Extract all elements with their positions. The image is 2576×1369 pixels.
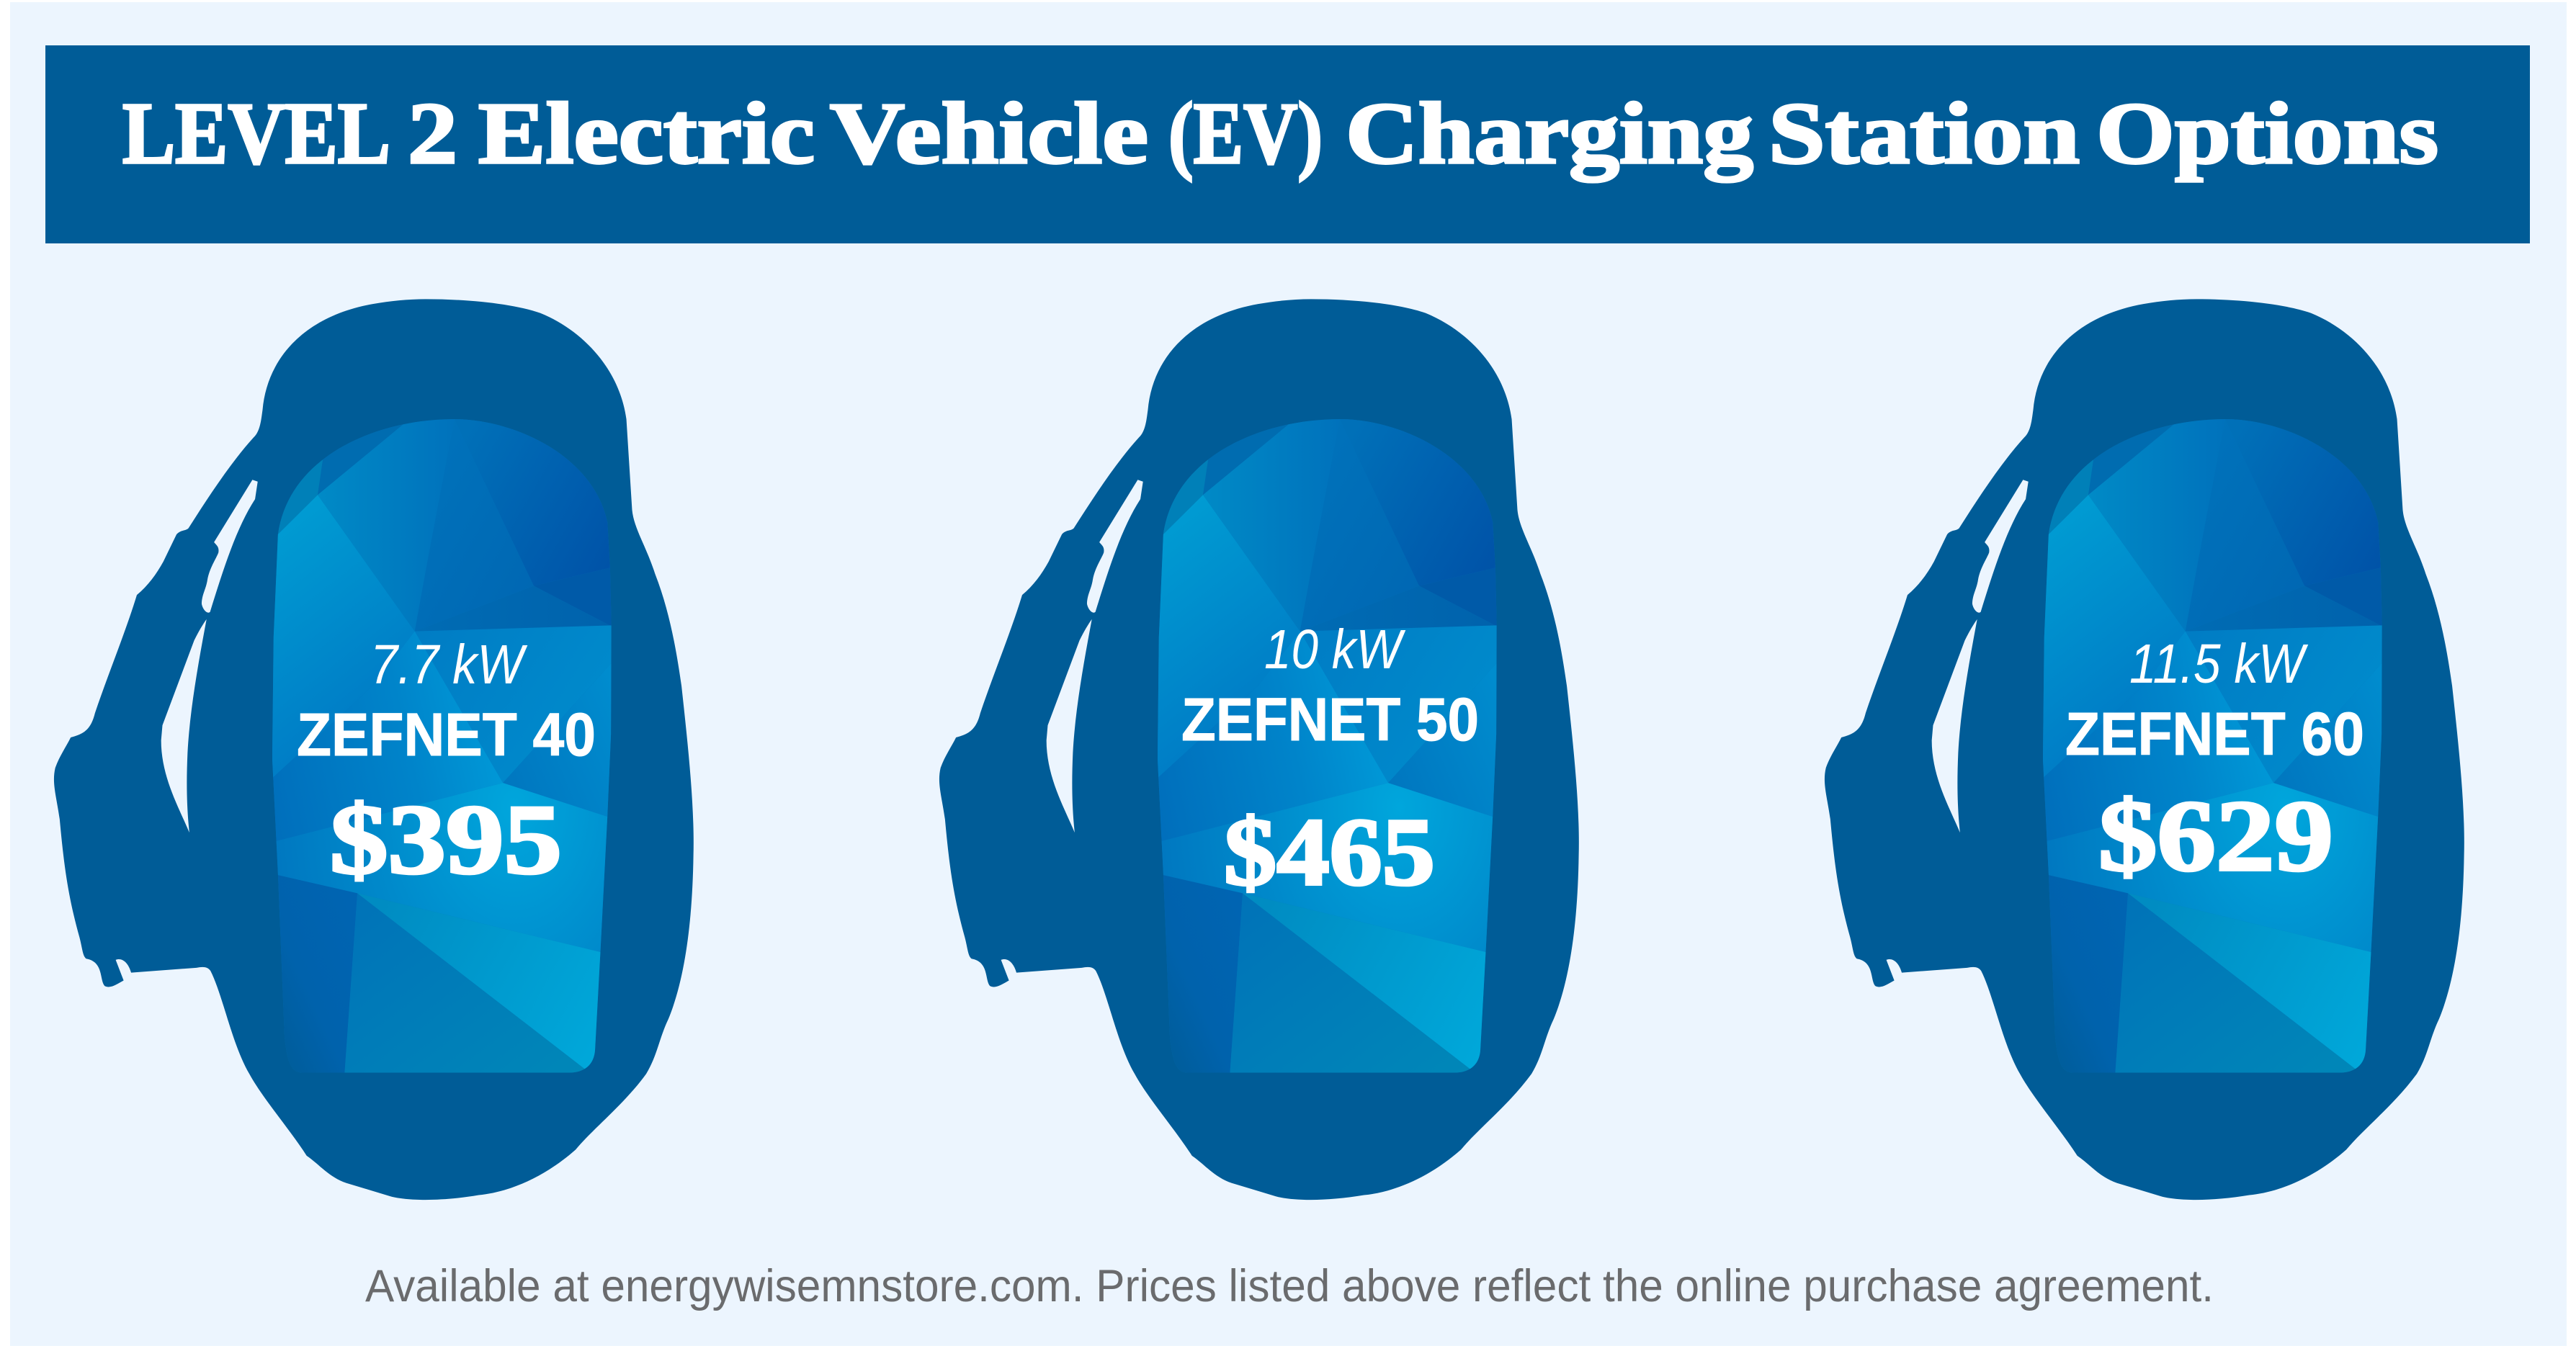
panel: ZEFNET 60 charger — [1825, 299, 2464, 1200]
power rating: 10 kW — [1264, 619, 1406, 681]
power rating: 7.7 kW — [370, 634, 528, 696]
title: Charging — [1346, 85, 1753, 182]
title: Options — [2096, 85, 2438, 182]
price: $629 — [2098, 780, 2333, 892]
icon: charging station silhouette — [939, 299, 1579, 1200]
model name: ZEFNET 40 — [297, 701, 596, 768]
panel: ZEFNET 50 charger — [939, 299, 1579, 1200]
title: 2 — [408, 85, 457, 182]
title: Electric — [478, 85, 815, 182]
panel: ZEFNET 40 charger — [54, 299, 694, 1200]
price: $395 — [330, 784, 562, 894]
model name: ZEFNET 60 — [2065, 700, 2364, 768]
footnote: Available at energywisemnstore.com. Prices listed above reflect the online purchase agreement. — [365, 1261, 2214, 1311]
title: (EV) — [1168, 85, 1323, 182]
title: LEVEL — [122, 85, 390, 182]
icon: charging station silhouette — [54, 299, 694, 1200]
icon: charging station silhouette — [1825, 299, 2464, 1200]
power rating: 11.5 kW — [2129, 633, 2309, 695]
price: $465 — [1224, 799, 1435, 905]
title — [122, 85, 2438, 182]
title: Vehicle — [830, 85, 1148, 182]
title: Station — [1768, 85, 2080, 182]
model name: ZEFNET 50 — [1181, 686, 1479, 753]
title banner — [45, 45, 2530, 243]
